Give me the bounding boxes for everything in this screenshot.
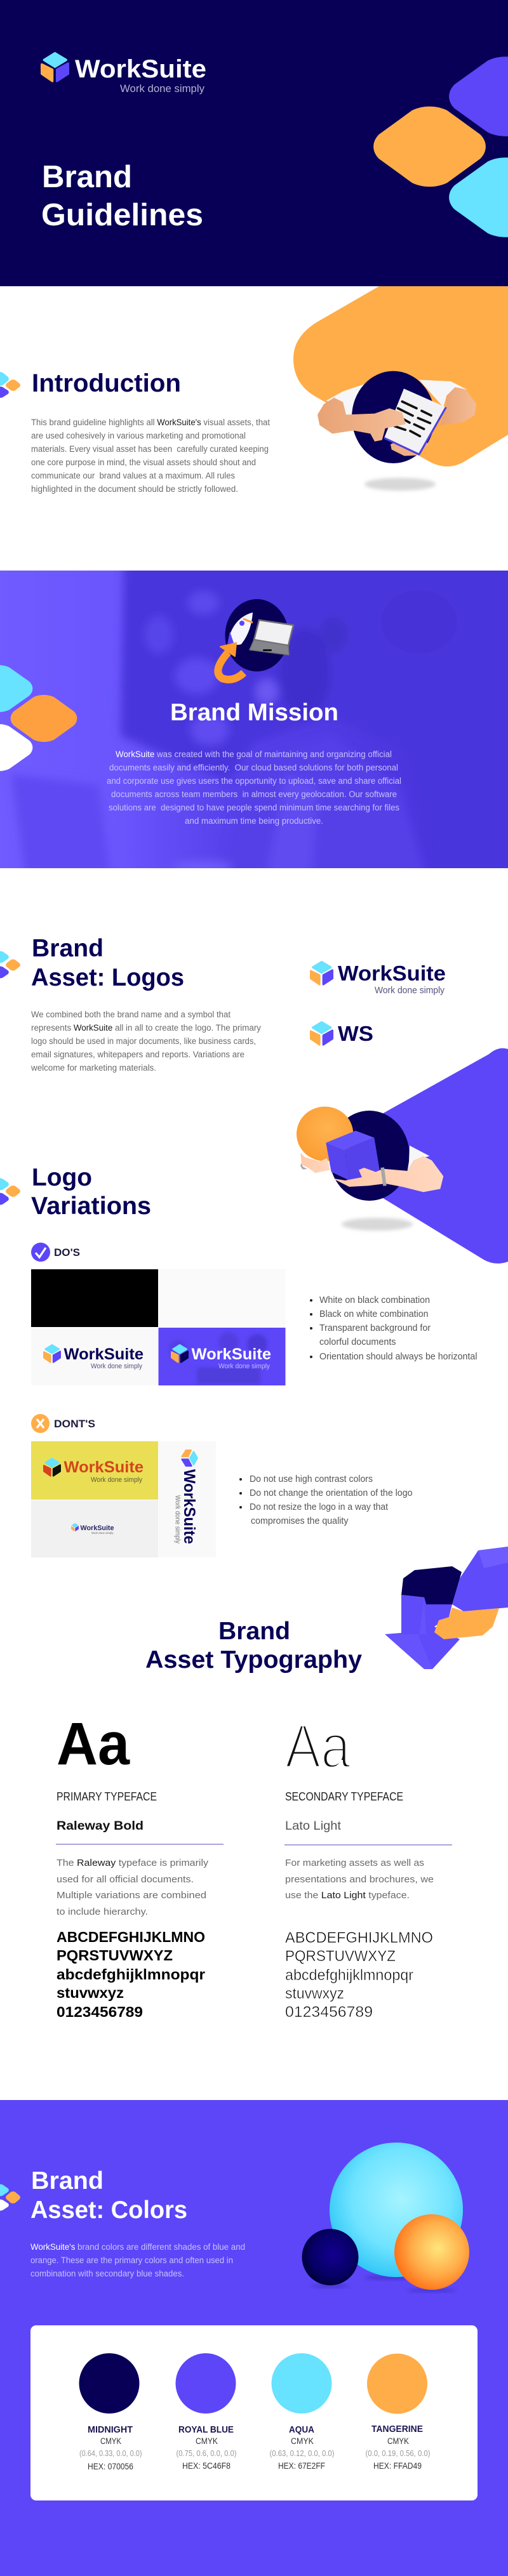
text block: logos body [30,1010,261,1073]
panel: brand mission [0,558,508,876]
swatch: aqua: CMYK [291,2436,314,2446]
text block: colors body: combination with secondary blue shades. [30,2269,184,2278]
swatch: tangerine: HEX: FFAD49 [373,2461,422,2471]
swatch: tangerine: TANGERINE [371,2424,423,2434]
text block: mission body: and corporate use gives users the opportunity to upload, save and share official [107,776,401,786]
logo: too small: WorkSuite [80,1524,114,1532]
logo: rotated: WorkSuite [180,1469,198,1544]
decorative diamonds: hero [373,56,508,237]
illustration: arrows [385,1547,508,1669]
logo: WorkSuite on dark: Work done simply [120,83,204,95]
text block: colors body: WorkSuite's brand colors are different shades of blue and [30,2242,245,2252]
panel: brand asset colors [0,2100,508,2576]
icon: check [31,1243,50,1262]
column: primary typeface: Multiple variations are combined [57,1890,206,1901]
heading: Brand Mission: Brand Mission [170,699,338,726]
swatch: midnight: CMYK [100,2436,121,2446]
text block: introduction body: materials. Every visual asset has been carefully curated keeping [31,444,269,454]
heading: Logo Variations: Variations [31,1192,151,1220]
list: dont's rules: Do not resize the logo in a way that [250,1502,388,1512]
logo: too small [71,1524,114,1535]
text block: logos body: email signatures, whitepapers and reports. Variations are [31,1050,244,1059]
heading: Logo Variations [31,1164,151,1220]
swatch: royal blue: (0.75, 0.6, 0.0, 0.0) [177,2449,236,2458]
text block: introduction body: highlighted in the document should be strictly followed. [31,484,238,494]
text block: logos body: We combined both the brand name and a symbol that [31,1010,231,1019]
swatch: midnight: MIDNIGHT [88,2425,133,2435]
logo on purple: Work done simply [218,1363,270,1370]
list: do's rules: White on black combination [319,1295,430,1305]
heading: Brand Asset: Logos: Asset: Logos [31,964,184,991]
swatch: midnight: (0.64, 0.33, 0.0, 0.0) [79,2449,142,2458]
panel: logo variations [0,1164,478,1557]
logo: too small: Work done simply [91,1531,114,1535]
swatch: tangerine: (0.0, 0.19, 0.56, 0.0) [366,2449,431,2458]
list: dont's rules: Do not use high contrast colors [250,1474,373,1484]
column: primary typeface: Raleway Bold [57,1819,144,1833]
heading: Brand Asset: Colors: Asset: Colors [30,2196,187,2224]
logo on light: Work done simply [91,1363,142,1370]
logo: high contrast: Work done simply [91,1476,142,1484]
column: secondary typeface: 0123456789 [285,2004,373,2021]
heading: Brand Asset Typography [145,1618,362,1674]
swatch: aqua [269,2353,334,2471]
title [41,160,203,232]
icon: cross [31,1414,50,1433]
column: primary typeface: abcdefghijklmnopqr [57,1966,205,1983]
logo: high contrast [44,1458,144,1484]
list: dont's rules: compromises the quality [251,1516,349,1526]
column: secondary typeface: abcdefghijklmnopqr [285,1967,413,1984]
logo: high contrast: WorkSuite [64,1458,144,1476]
logo: WS short [311,1022,373,1045]
heading: Brand Asset: Logos: Brand [32,935,104,962]
list: do's rules: colorful documents [319,1337,396,1347]
swatch: midnight: HEX: 070056 [88,2462,133,2471]
list: dont's rules [239,1474,413,1526]
swatch: midnight [79,2353,142,2471]
heading: Brand Asset: Colors: Brand [31,2167,104,2195]
swatch: royal blue: CMYK [196,2436,218,2446]
specimen: light Aa: Aa [285,1712,351,1781]
column: secondary typeface: For marketing assets as well as [285,1858,424,1868]
specimen: bold Aa: Aa [57,1710,130,1778]
text block: logos body: welcome for marketing materials. [30,1063,156,1073]
column: secondary typeface: PQRSTUVWXYZ [285,1948,396,1965]
column: secondary typeface: presentations and brochures, we [285,1874,434,1885]
column: secondary typeface: stuvwxyz [285,1985,344,2002]
list: dont's rules: Do not change the orientation of the logo [250,1488,413,1498]
heading: Logo Variations: Logo [32,1164,92,1191]
text block: mission body: WorkSuite was created with the goal of maintaining and organizing official [116,750,392,759]
column: secondary typeface [284,1790,452,2021]
icon: section diamonds [0,951,20,978]
illustration: colour spheres [302,2143,469,2292]
label: DONT'S: DONT'S [54,1418,95,1430]
text block: logos body: logo should be used in major documents, like business cards, [31,1036,256,1046]
text block: introduction body: This brand guideline highlights all WorkSuite's visual assets, that [31,418,270,427]
panel: introduction [0,286,508,494]
purple backdrop shape [381,1048,508,1264]
text block: colors body: orange. These are the primary colors and often used in [30,2256,233,2265]
column: primary typeface: PQRSTUVWXYZ [57,1947,173,1964]
text block: mission body: solutions are designed to have people spend minimum time searching for files [109,803,399,812]
logo: WorkSuite on dark: WorkSuite [75,55,206,83]
list: do's rules: Transparent background for [319,1323,431,1333]
hero panel [0,0,508,286]
heading: Brand Asset Typography: Asset Typography [145,1646,362,1674]
icon: rocket and laptop [218,599,293,680]
column: secondary typeface: ABCDEFGHIJKLMNO [285,1929,433,1946]
swatch: tangerine [366,2353,431,2471]
logo: primary: Work done simply [375,986,445,996]
orange backdrop shape [293,286,508,466]
list: do's rules: Orientation should always be horizontal [319,1352,478,1362]
list: do's rules [310,1295,478,1362]
swatch: aqua: HEX: 67E2FF [278,2461,325,2471]
icon: section diamonds [0,1179,20,1205]
logo: primary: WorkSuite [338,961,446,985]
swatch: aqua: AQUA [289,2425,314,2435]
heading: Brand Asset: Logos [31,935,184,991]
column: primary typeface: PRIMARY TYPEFACE [57,1790,157,1803]
title: Brand [42,160,132,194]
text block: mission body: documents easily and efficiently. Our cloud based solutions for both personal [109,763,398,772]
swatch: royal blue: ROYAL BLUE [178,2425,234,2435]
text block: mission body: and maximum time being productive. [185,816,323,826]
logo on light: WorkSuite [64,1345,144,1363]
logo: rotated [174,1450,198,1544]
icon: section diamonds [0,372,20,398]
panel: brand asset typography [56,1547,508,2021]
heading: Brand Asset: Colors [30,2167,187,2224]
text block: introduction body [31,418,270,494]
text block: introduction body: communicate our brand values at a maximum. All rules [31,471,235,480]
column: primary typeface [56,1790,224,2020]
text block: logos body: represents WorkSuite all in all to create the logo. The primary [31,1023,261,1033]
column: secondary typeface: use the Lato Light typeface. [285,1890,410,1901]
list: do's rules: Black on white combination [319,1309,428,1319]
swatch: aqua: (0.63, 0.12, 0.0, 0.0) [269,2449,334,2458]
column: primary typeface: 0123456789 [57,2004,143,2020]
text block: introduction body: are used cohesively in various marketing and promotional [31,431,246,440]
swatch: tangerine: CMYK [387,2436,409,2446]
text block: mission body [107,750,401,826]
logo on purple: WorkSuite [192,1345,271,1363]
heading: Introduction: Introduction [32,369,181,397]
column: primary typeface: stuvwxyz [57,1985,124,2001]
logo on purple [171,1345,271,1370]
text block: introduction body: one core purpose in mind, the visual assets should shout and [31,458,256,467]
label: DO'S: DO'S [54,1246,80,1258]
column: primary typeface: to include hierarchy. [57,1906,148,1917]
background photo tint [12,571,420,868]
logo: WorkSuite on dark [42,53,206,95]
logo grid: dont's [31,1441,216,1557]
logo: rotated: Work done simply [174,1495,182,1543]
logo on light [44,1345,144,1370]
panel: brand asset logos [0,935,508,1264]
column: primary typeface: The Raleway typeface is primarily [57,1858,209,1868]
logo: WS short: WS [338,1022,373,1045]
icon: section diamonds [0,665,77,771]
title: Guidelines [41,198,203,232]
swatch: royal blue [175,2353,236,2471]
column: primary typeface: ABCDEFGHIJKLMNO [57,1929,205,1945]
logo grid: do's [31,1269,286,1385]
text block: mission body: documents across team members in almost every geolocation. Our software [111,789,397,799]
card: colour palette [30,2325,478,2500]
column: secondary typeface: SECONDARY TYPEFACE [285,1790,403,1803]
text block: colors body [30,2242,245,2278]
logo: primary [311,961,446,996]
illustration: hands holding document [318,371,476,491]
swatch: royal blue: HEX: 5C46F8 [182,2461,231,2471]
illustration: hands holding cube [297,1107,443,1231]
icon: section diamonds [0,2184,20,2210]
heading: Brand Asset Typography: Brand [218,1618,290,1645]
column: secondary typeface: Lato Light [285,1819,342,1833]
column: primary typeface: used for all official documents. [57,1874,194,1885]
